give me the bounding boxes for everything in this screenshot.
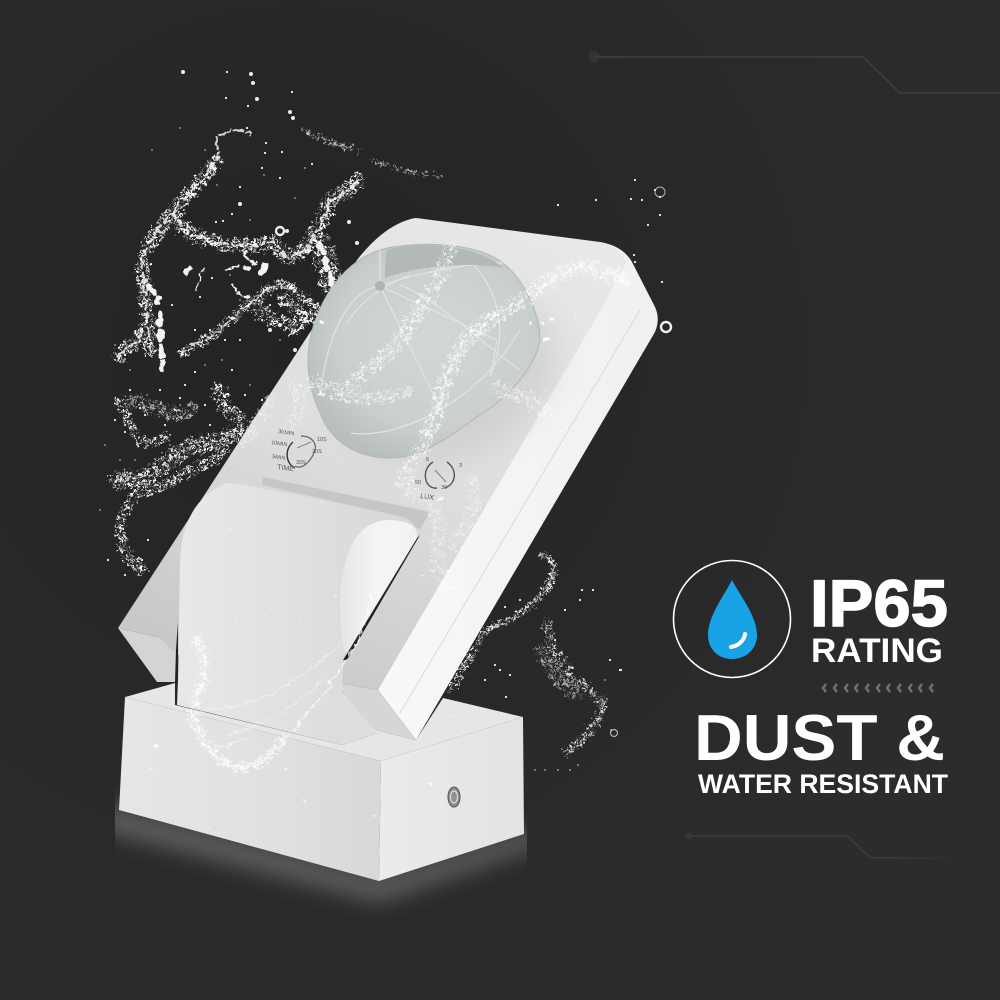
plate side face <box>378 242 658 740</box>
loop across base <box>192 595 372 768</box>
lux dial: 30 <box>441 485 447 491</box>
lux dial: 3 <box>459 463 462 469</box>
base right face <box>379 717 524 881</box>
water foam over device <box>192 250 623 768</box>
dust and water resistant text <box>694 701 948 799</box>
scattered water droplets on dark background <box>100 72 671 770</box>
time dial <box>271 429 327 473</box>
time dial: 20S <box>312 449 322 455</box>
lux dial: LUX <box>420 493 435 502</box>
water over device <box>151 268 623 830</box>
water beads on device <box>156 320 551 784</box>
RATING label: RATING <box>811 632 943 670</box>
right end cap of plate <box>338 683 416 740</box>
foam texture of the splash behind the sensor <box>118 130 603 753</box>
time dial: 5MIN <box>272 454 286 462</box>
base front face <box>119 697 381 881</box>
time dial: 10MIN <box>271 440 288 448</box>
time dial: 30MIN <box>278 429 295 437</box>
hinged bracket cover <box>177 483 417 745</box>
cover lower side <box>337 685 377 745</box>
dome grid lines <box>320 250 520 434</box>
DUST heading: DUST & <box>694 701 945 774</box>
plate top face <box>118 218 626 690</box>
dark gap beside cover <box>175 535 420 682</box>
thin streak lines <box>200 640 345 747</box>
dome cap facet <box>385 245 503 278</box>
screw <box>448 787 460 807</box>
plate seam line <box>400 310 640 713</box>
time dial: TIME <box>277 464 295 473</box>
solid water strands behind the sensor <box>118 130 554 630</box>
dome shadow <box>316 256 584 494</box>
base top face <box>125 683 523 761</box>
slot under dome <box>262 477 430 530</box>
lux dial: 50 <box>415 480 421 486</box>
time dial: 30S <box>296 460 306 466</box>
decorative circuit line top right <box>588 51 1000 93</box>
mounting base <box>119 683 524 881</box>
lux dial: 5 <box>426 457 429 463</box>
WATER RESISTANT label: WATER RESISTANT <box>698 769 948 799</box>
stream from top right over dome <box>423 268 623 447</box>
PIR sensor dome <box>308 244 540 458</box>
decorative circuit line bottom right <box>686 832 960 858</box>
IP65 heading: IP65 <box>810 566 948 640</box>
floor reflection under base <box>100 802 540 902</box>
time dial: 10S <box>317 437 327 443</box>
chevron divider <box>823 684 933 692</box>
icon: water drop in circle <box>674 560 790 678</box>
left end cap of plate <box>118 628 178 682</box>
IP65 callout <box>674 560 948 678</box>
sensor device <box>118 218 658 745</box>
cover highlight <box>340 520 417 655</box>
lux dial <box>415 457 462 502</box>
